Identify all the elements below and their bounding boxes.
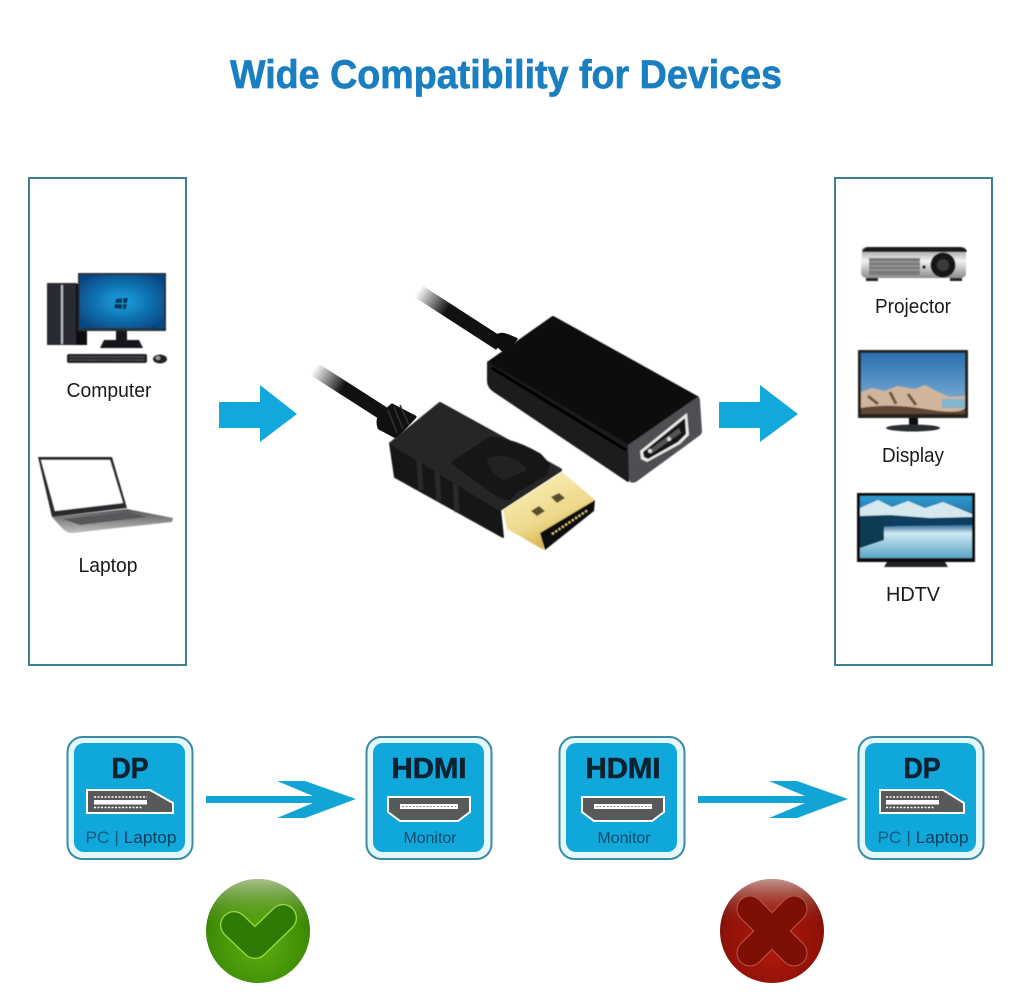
DP heading: DP [904, 753, 940, 785]
icon: desktop computer [47, 273, 167, 364]
DisplayPort plug [390, 404, 595, 550]
arrow: unsupported direction [698, 781, 848, 818]
label: Laptop: Laptop [78, 555, 138, 577]
DisplayPort cable [314, 369, 415, 437]
HDMI heading: HDMI [586, 753, 660, 785]
arrow: input to adapter [219, 385, 297, 442]
panel: source devices [29, 178, 186, 665]
card: DP display side [858, 737, 984, 859]
arrow: supported direction [206, 781, 356, 818]
HDMI adapter body [488, 318, 702, 483]
label: Display: Display [882, 445, 944, 467]
caption: Monitor [404, 830, 456, 847]
caption: PC | Laptop [86, 829, 176, 847]
icon: green check, supported [206, 879, 310, 983]
caption: Monitor [598, 830, 650, 847]
icon: laptop [38, 457, 173, 533]
label: Computer: Computer [66, 380, 152, 402]
card: HDMI monitor [366, 737, 492, 859]
card: HDMI source [560, 737, 684, 859]
HDMI heading: HDMI [392, 753, 466, 785]
panel: output devices [835, 178, 992, 665]
arrow: adapter to output [719, 385, 798, 442]
icon: display [858, 350, 968, 432]
gold connector [503, 472, 595, 550]
icon: HDTV [857, 493, 975, 567]
adapter cable [418, 291, 516, 352]
icon: red cross, not supported [720, 879, 824, 983]
label: Projector: Projector [875, 296, 951, 318]
DP heading: DP [112, 753, 148, 785]
plug latch [453, 438, 548, 499]
label: HDTV: HDTV [886, 584, 941, 606]
icon: HDMI port [582, 797, 664, 821]
icon: DP port [880, 790, 964, 813]
caption: PC | Laptop [878, 829, 968, 847]
icon: projector [861, 247, 967, 281]
icon: DP port [87, 790, 173, 813]
icon: HDMI port [388, 797, 470, 821]
card: DP source [68, 737, 192, 859]
HDMI socket face [628, 397, 702, 483]
title: Wide Compatibility for Devices [230, 53, 782, 97]
